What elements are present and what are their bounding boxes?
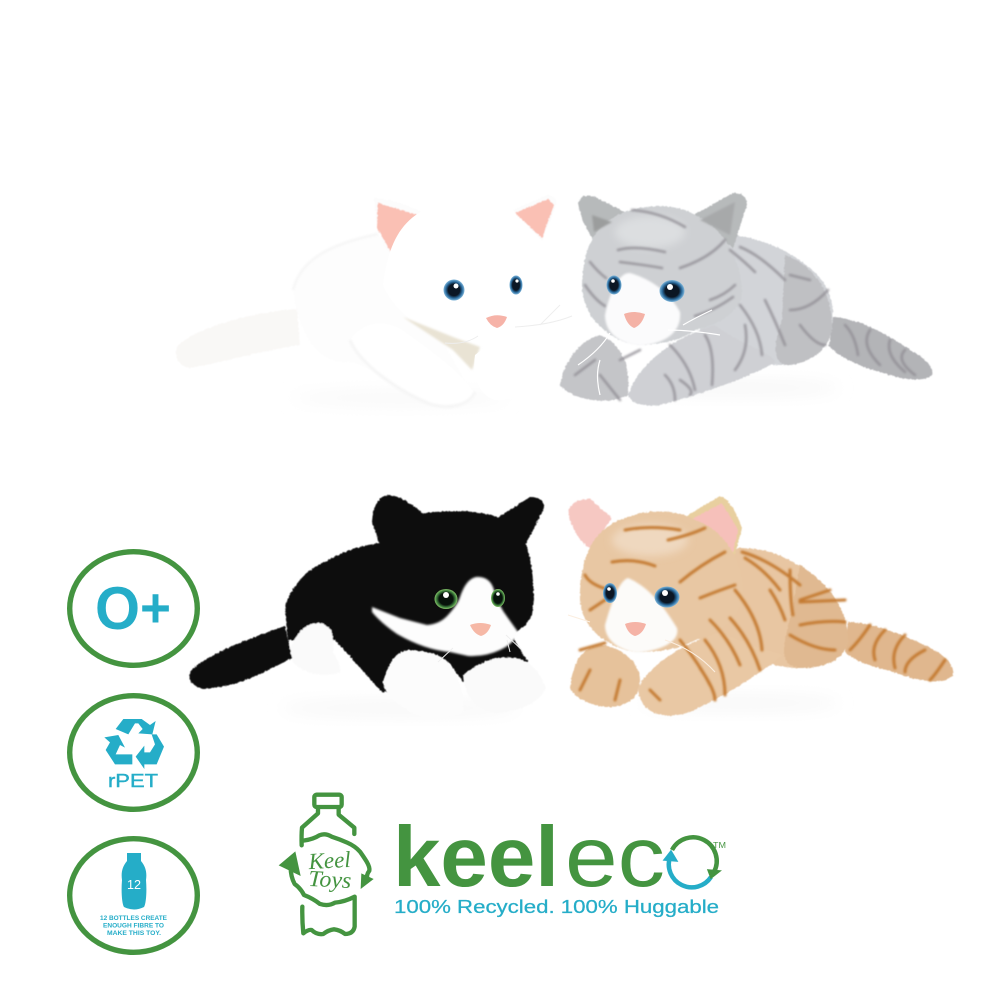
- logo: tagline: 100% Recycled. 100% Huggable: [394, 896, 719, 917]
- eyes: [434, 589, 505, 609]
- black and white cat: [190, 495, 546, 718]
- text block: ENOUGH FIBRE TO: [103, 922, 164, 929]
- white blaze and collar: [372, 577, 518, 656]
- text block: [100, 915, 167, 937]
- badge: age 0+: O: [95, 575, 140, 642]
- text block: MAKE THIS TOY.: [107, 930, 161, 937]
- badge: rPET recycled: rPET: [108, 770, 158, 791]
- white cat: [176, 195, 572, 407]
- icon: recycling arrows: [104, 719, 164, 769]
- eyes: [603, 583, 680, 608]
- icon: recycling o: [664, 837, 720, 887]
- logo: keeleco wordmark: TM: [713, 841, 726, 850]
- eyes: [444, 276, 522, 300]
- logo: keeleco wordmark: keel: [393, 810, 559, 905]
- stripes: [575, 210, 915, 400]
- badge: age 0+: +: [140, 576, 171, 639]
- logo: recycled bottle mark: [279, 795, 374, 934]
- badge: age 0+: [70, 552, 197, 665]
- text block: 12 BOTTLES CREATE: [100, 915, 167, 922]
- muzzle: [605, 578, 677, 653]
- logo: keeleco wordmark: ec: [565, 810, 665, 905]
- badge: rPET recycled: [70, 696, 197, 809]
- grey tabby cat: [560, 193, 933, 405]
- muzzle: [605, 273, 680, 346]
- black chest between paws: [440, 636, 528, 682]
- logo: keeleco wordmark: [393, 810, 726, 905]
- logo: recycled bottle mark: Toys: [308, 866, 352, 893]
- badge: 12 bottles: 12: [127, 877, 141, 892]
- eyes: [606, 276, 684, 302]
- stripes: [580, 528, 945, 700]
- ginger tabby cat: [568, 496, 953, 715]
- badge: 12 bottles: [70, 839, 197, 952]
- icon: bottle: [122, 853, 146, 910]
- logo: recycled bottle mark: Keel: [307, 847, 351, 874]
